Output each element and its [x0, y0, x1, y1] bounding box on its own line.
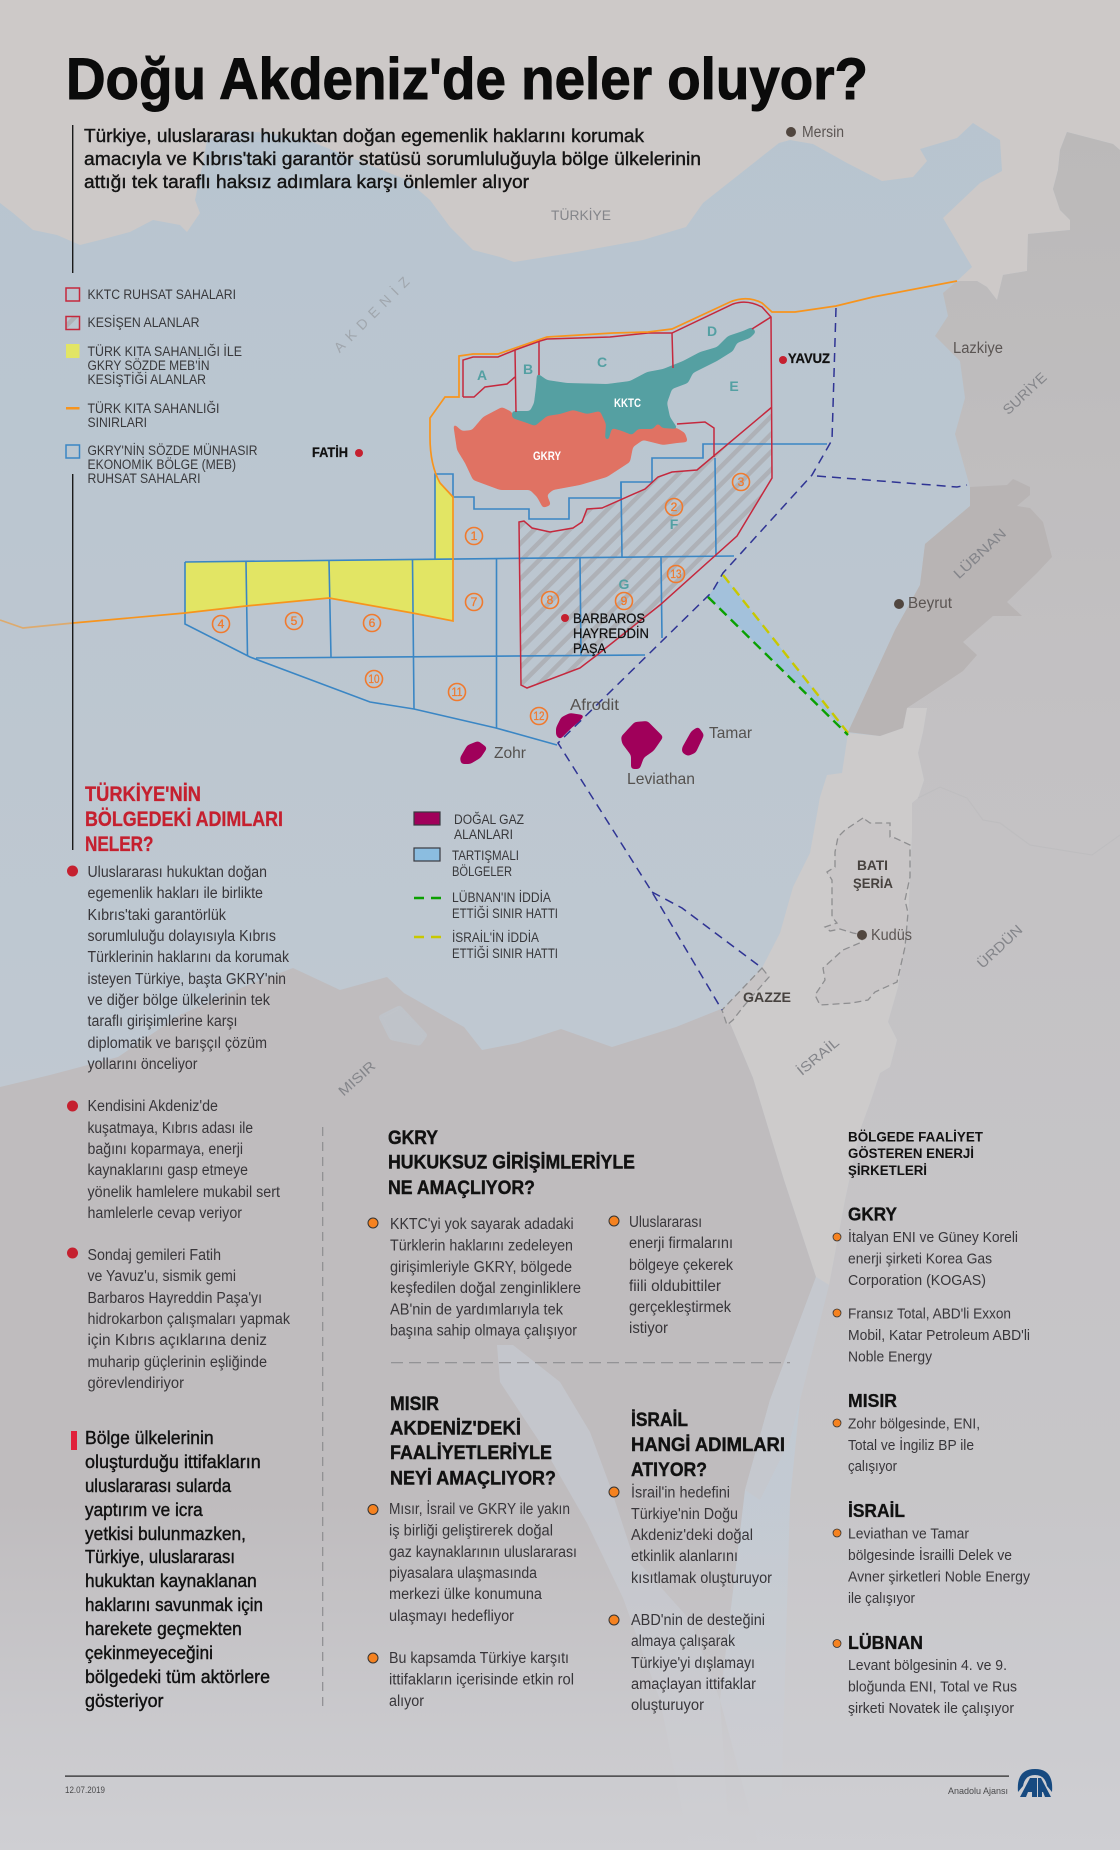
map: KKTC licence blocks (red): [463, 302, 772, 688]
country and sea labels: AKDENİZ: [330, 272, 413, 355]
map: Cyprus GKRY: [453, 407, 688, 508]
callout: alliances paragraph: çekinmeyeceğini: [85, 1643, 213, 1663]
text block: GKRY first point: keşfedilen doğal zenginliklere: [390, 1280, 581, 1297]
text block: third point: ve Yavuz'u, sismik gemi: [88, 1268, 236, 1285]
city labels: Mersin: [802, 124, 844, 141]
callout: alliances paragraph: harekete geçmekten: [85, 1619, 242, 1639]
subtitle: attığı tek taraflı haksız adımlara karşı önlemler alıyor: [84, 171, 529, 192]
companies: Israel: [833, 1500, 1030, 1607]
text block: first point: sorumluluğu dolayısıyla Kıbrıs: [88, 928, 276, 945]
map: block letters: C: [597, 354, 607, 370]
text block: third point: Sondaj gemileri Fatih: [88, 1247, 221, 1264]
gas field labels: [494, 697, 753, 788]
heading: Türkiye's steps: BÖLGEDEKİ ADIMLARI: [85, 808, 283, 831]
text block: Egypt second point: ittifakların içerisinde etkin rol: [389, 1672, 574, 1688]
map: block letters: F: [670, 516, 679, 532]
text block: GKRY second point: istiyor: [629, 1320, 668, 1337]
text block: second point: kuşatmaya, Kıbrıs adası ile: [88, 1120, 253, 1137]
map: numbered blocks: 12: [534, 709, 545, 723]
map: block letters: G: [619, 576, 630, 592]
text block: Israel second point: [609, 1612, 765, 1714]
city labels: [743, 124, 1003, 1005]
companies: Egypt: Zohr bölgesinde, ENI,: [848, 1416, 980, 1432]
panel: Israel steps: [609, 1408, 785, 1714]
companies: Lebanon: Levant bölgesinin 4. ve 9.: [848, 1657, 1007, 1674]
text block: GKRY first point: KKTC'yi yok sayarak adadaki: [390, 1216, 574, 1233]
text block: first point: taraflı girişimlerine karşı: [88, 1013, 238, 1030]
text block: second point: bağını koparmaya, enerji: [88, 1141, 243, 1158]
footer: 12.07.2019: [65, 1785, 105, 1796]
companies: Israel: İSRAİL: [848, 1500, 905, 1521]
text block: Egypt first point: ulaşmayı hedefliyor: [389, 1608, 514, 1625]
text block: Israel first point: kısıtlamak oluşturuyor: [631, 1570, 772, 1587]
heading: Israel: HANGİ ADIMLARI: [631, 1433, 785, 1456]
text block: third point: görevlendiriyor: [88, 1375, 184, 1392]
text block: third point: muharip güçlerinin eşliğinde: [88, 1354, 267, 1371]
legend: licence areas: GKRY'NİN SÖZDE MÜNHASIR: [88, 443, 258, 458]
map: disputed area: [708, 575, 848, 733]
legend: licence areas: KKTC RUHSAT SAHALARI: [88, 287, 236, 302]
companies: Israel: bölgesinde İsrailli Delek ve: [848, 1546, 1012, 1564]
map: numbered blocks: 8: [547, 593, 554, 607]
text block: GKRY second point: bölgeye çekerek: [629, 1257, 733, 1274]
text block: GKRY first point: AB'nin de yardımlarıyla tek: [390, 1302, 563, 1318]
text block: first point: Kıbrıs'taki garantörlük: [88, 907, 226, 924]
companies: GKRY: Mobil, Katar Petroleum ABD'li: [848, 1327, 1030, 1344]
text block: Egypt second point: [368, 1650, 574, 1710]
map: Lebanon claimed boundary: [708, 597, 848, 735]
text block: Egypt first point: [368, 1500, 577, 1625]
map: numbered blocks: 4: [218, 617, 225, 631]
footer: Anadolu Ajansı: [948, 1786, 1008, 1797]
map: numbered blocks: [212, 474, 750, 724]
heading: energy companies: ŞİRKETLERİ: [848, 1163, 927, 1178]
text block: second point: yönelik hamlelere mukabil sert: [88, 1184, 281, 1201]
text block: third point: [67, 1247, 290, 1392]
text block: second point: kaynaklarını gasp etmeye: [88, 1162, 248, 1179]
companies: Lebanon: şirketi Novatek ile çalışıyor: [848, 1700, 1014, 1717]
companies: GKRY: GKRY: [848, 1204, 898, 1224]
heading: energy companies: [848, 1130, 984, 1178]
country and sea labels: [330, 206, 1050, 1099]
footer: [65, 1776, 1009, 1797]
callout: alliances paragraph: oluşturduğu ittifakların: [85, 1452, 261, 1472]
country and sea labels: İSRAİL: [793, 1033, 842, 1078]
legend: licence areas: KESİŞEN ALANLAR: [88, 315, 200, 330]
text block: first point: isteyen Türkiye, başta GKRY'nin: [88, 971, 286, 988]
map: yellow overlap areas: [185, 475, 453, 621]
callout: alliances paragraph: yetkisi bulunmazken,: [85, 1524, 246, 1544]
heading: Israel: ATIYOR?: [631, 1459, 707, 1481]
heading: Egypt: FAALİYETLERİYLE: [390, 1441, 552, 1464]
heading: energy companies: BÖLGEDE FAALİYET: [848, 1130, 984, 1144]
companies: Israel: ile çalışıyor: [848, 1590, 915, 1607]
map: drilling ship markers: PAŞA: [573, 640, 607, 656]
heading: Egypt: MISIR: [390, 1393, 439, 1415]
legend: gas fields and claimed boundaries: DOĞAL GAZ: [454, 812, 524, 827]
legend: gas fields and claimed boundaries: [414, 812, 558, 961]
map: maritime boundary dashed lines: [558, 308, 967, 1010]
subtitle: [72, 125, 701, 273]
companies: Lebanon: LÜBNAN: [848, 1632, 923, 1653]
map: block letters: E: [729, 378, 739, 394]
map: Turkish continental shelf boundary: [0, 281, 957, 628]
city labels: Beyrut: [908, 595, 953, 612]
map: numbered blocks: 11: [452, 685, 463, 699]
text block: GKRY second point: Uluslararası: [629, 1214, 702, 1231]
text block: third point: için Kıbrıs açıklarına deniz: [88, 1332, 267, 1349]
text block: GKRY second point: enerji firmalarını: [629, 1235, 733, 1252]
legend: licence areas: [66, 287, 258, 486]
map: numbered blocks: 9: [621, 594, 628, 608]
subtitle: amacıyla ve Kıbrıs'taki garantör statüsü sorumluluğuyla bölge ülkelerinin: [84, 148, 701, 169]
text block: first point: Türklerinin haklarını da korumak: [88, 949, 289, 966]
city labels: GAZZE: [743, 989, 791, 1005]
map: numbered blocks: 13: [670, 567, 682, 581]
text block: first point: yollarını önceliyor: [88, 1056, 198, 1073]
text block: Egypt second point: alıyor: [389, 1693, 424, 1710]
legend: gas fields and claimed boundaries: İSRAİL'İN İDDİA: [452, 930, 539, 945]
text block: Israel second point: Türkiye'yi dışlamayı: [631, 1655, 755, 1672]
text block: Israel second point: ABD'nin de desteğini: [631, 1612, 765, 1629]
subtitle: Türkiye, uluslararası hukuktan doğan egemenlik haklarını korumak: [84, 125, 645, 146]
text block: second point: [67, 1098, 281, 1222]
legend: licence areas: EKONOMİK BÖLGE (MEB): [88, 457, 236, 472]
map: Cyprus GKRY: GKRY: [533, 449, 561, 463]
callout: alliances paragraph: Bölge ülkelerinin: [85, 1428, 214, 1448]
legend: gas fields and claimed boundaries: TARTIŞMALI: [452, 848, 519, 863]
heading: Türkiye's steps: TÜRKİYE'NİN: [85, 783, 201, 806]
text block: first point: ve diğer bölge ülkelerinin tek: [88, 992, 270, 1009]
country and sea labels: SURİYE: [999, 368, 1050, 418]
text block: Egypt first point: piyasalara ulaşmasında: [389, 1565, 537, 1582]
map: hatched overlap areas: [519, 407, 772, 688]
text block: first point: egemenlik hakları ile birlikte: [88, 885, 263, 902]
text block: second point: Kendisini Akdeniz'de: [88, 1098, 218, 1115]
text block: Israel first point: Akdeniz'deki doğal: [631, 1527, 753, 1544]
companies: Lebanon: bloğunda ENI, Total ve Rus: [848, 1678, 1017, 1696]
map: GKRY licence blocks (blue): [185, 444, 827, 745]
map: drilling ship markers: BARBAROS: [573, 610, 645, 626]
companies: Egypt: Total ve İngiliz BP ile: [848, 1436, 974, 1454]
text block: GKRY first point: başına sahip olmaya çalışıyor: [390, 1322, 577, 1340]
panel: Türkiye's steps: [67, 474, 290, 1392]
gas field labels: Leviathan: [627, 771, 695, 788]
map: numbered blocks: 7: [471, 595, 478, 609]
map: block letters: [477, 323, 739, 592]
callout: alliances paragraph: bölgedeki tüm aktörlere: [85, 1667, 270, 1687]
icon: Anadolu Agency logo: [1018, 1769, 1052, 1797]
text block: GKRY second point: [609, 1214, 733, 1337]
companies: Israel: Avner şirketleri Noble Energy: [848, 1568, 1030, 1586]
legend: licence areas: GKRY SÖZDE MEB'İN: [88, 358, 210, 373]
companies: GKRY: Fransız Total, ABD'li Exxon: [848, 1306, 1011, 1322]
country and sea labels: LÜBNAN: [949, 524, 1009, 582]
text block: Israel first point: İsrail'in hedefini: [631, 1484, 730, 1502]
legend: licence areas: TÜRK KITA SAHANLIĞI: [88, 401, 220, 416]
text block: Egypt first point: merkezi ülke konumuna: [389, 1586, 542, 1603]
text block: third point: hidrokarbon çalışmaları yapmak: [88, 1311, 290, 1328]
callout: alliances paragraph: haklarını savunmak için: [85, 1595, 263, 1615]
map: numbered blocks: 3: [738, 475, 745, 489]
legend: gas fields and claimed boundaries: ALANLARI: [454, 827, 513, 842]
text block: Israel second point: amaçlayan ittifaklar: [631, 1676, 756, 1693]
map: gas fields: [461, 714, 703, 768]
text block: Israel second point: oluşturuyor: [631, 1697, 704, 1714]
text block: Egypt first point: iş birliği geliştirerek doğal: [389, 1522, 553, 1540]
gas field labels: Zohr: [494, 745, 527, 762]
map: Cyprus KKTC: [512, 327, 756, 441]
country and sea labels: MISIR: [335, 1058, 378, 1099]
map: Israel claimed boundary: [723, 575, 848, 733]
map: drilling ship markers: [312, 350, 830, 656]
text block: GKRY first point: Türklerin haklarını zedeleyen: [390, 1238, 573, 1254]
text block: GKRY first point: [368, 1216, 581, 1340]
text block: second point: hamlelerle cevap veriyor: [88, 1205, 242, 1222]
legend: gas fields and claimed boundaries: LÜBNAN'IN İDDİA: [452, 890, 551, 905]
text block: first point: diplomatik ve barışçıl çözüm: [88, 1035, 267, 1052]
companies: GKRY: Noble Energy: [848, 1348, 932, 1366]
callout: alliances paragraph: Türkiye, uluslararası: [85, 1547, 235, 1567]
heading: Israel: İSRAİL: [631, 1408, 688, 1431]
title: Doğu Akdeniz'de neler oluyor?: [66, 47, 868, 112]
map: West Bank: [815, 818, 910, 1005]
text block: Egypt second point: Bu kapsamda Türkiye karşıtı: [389, 1650, 569, 1667]
country and sea labels: TÜRKİYE: [551, 206, 611, 223]
heading: GKRY: NE AMAÇLIYOR?: [388, 1177, 535, 1199]
text block: Israel first point: etkinlik alanlarını: [631, 1548, 738, 1565]
legend: licence areas: TÜRK KITA SAHANLIĞI İLE: [88, 344, 242, 359]
map: block letters: B: [523, 361, 533, 377]
callout: alliances paragraph: uluslararası sularda: [85, 1476, 232, 1496]
legend: licence areas: RUHSAT SAHALARI: [88, 471, 200, 486]
map: numbered blocks: 2: [671, 500, 678, 514]
city labels: BATI: [857, 857, 888, 873]
legend: licence areas: KESİŞTİĞİ ALANLAR: [88, 372, 206, 387]
heading: Egypt: AKDENİZ'DEKİ: [390, 1416, 521, 1440]
text block: Egypt first point: gaz kaynaklarının uluslararası: [389, 1544, 577, 1561]
country and sea labels: ÜRDÜN: [973, 921, 1026, 971]
callout: alliances paragraph: [71, 1428, 270, 1711]
panel: Egypt aims: [368, 1393, 577, 1710]
heading: energy companies: GÖSTEREN ENERJİ: [848, 1146, 974, 1161]
text block: GKRY second point: gerçekleştirmek: [629, 1299, 731, 1316]
text block: GKRY first point: girişimleriyle GKRY, bölgede: [390, 1259, 572, 1276]
companies: Egypt: çalışıyor: [848, 1458, 897, 1475]
city labels: Lazkiye: [953, 340, 1003, 357]
map: drilling ship markers: YAVUZ: [788, 350, 830, 366]
callout: alliances paragraph: yaptırım ve icra: [85, 1500, 204, 1520]
companies: GKRY: [833, 1204, 1030, 1366]
legend: gas fields and claimed boundaries: ETTİĞİ SINIR HATTI: [452, 946, 558, 961]
legend: licence areas: SINIRLARI: [88, 415, 147, 430]
text block: first point: [67, 864, 289, 1073]
companies: Egypt: MISIR: [848, 1390, 897, 1411]
text block: Israel second point: almaya çalışarak: [631, 1633, 735, 1650]
panel: GKRY aims: [368, 1127, 733, 1340]
companies: Egypt: [833, 1390, 980, 1475]
map: drilling ship markers: FATİH: [312, 444, 348, 460]
text block: third point: Barbaros Hayreddin Paşa'yı: [88, 1290, 262, 1307]
text block: Israel first point: [609, 1484, 772, 1587]
legend: gas fields and claimed boundaries: ETTİĞİ SINIR HATTI: [452, 906, 558, 921]
heading: GKRY: [388, 1127, 635, 1199]
legend: gas fields and claimed boundaries: BÖLGELER: [452, 864, 512, 879]
heading: Türkiye's steps: NELER?: [85, 833, 154, 856]
heading: Israel: [631, 1408, 785, 1481]
map: numbered blocks: 1: [471, 529, 478, 543]
panel: energy companies: [833, 1130, 1030, 1717]
heading: Egypt: [390, 1393, 556, 1490]
heading: GKRY: GKRY: [388, 1127, 438, 1149]
map: numbered blocks: 10: [368, 672, 380, 686]
city labels: Kudüs: [871, 927, 912, 944]
heading: Egypt: NEYİ AMAÇLIYOR?: [390, 1466, 556, 1490]
text block: GKRY second point: fiili oldubittiler: [629, 1278, 721, 1295]
companies: GKRY: enerji şirketi Korea Gas: [848, 1250, 992, 1268]
map: Gaza: [722, 968, 769, 1025]
companies: Lebanon: [833, 1632, 1017, 1717]
callout: alliances paragraph: hukuktan kaynaklanan: [85, 1571, 257, 1591]
gas field labels: Tamar: [709, 725, 753, 742]
heading: Türkiye's steps: [85, 783, 283, 856]
map: block letters: A: [477, 367, 487, 383]
text block: first point: Uluslararası hukuktan doğan: [88, 864, 267, 881]
city labels: ŞERİA: [853, 875, 893, 891]
companies: Israel: Leviathan ve Tamar: [848, 1526, 969, 1542]
text block: Israel first point: Türkiye'nin Doğu: [631, 1506, 738, 1523]
callout: alliances paragraph: gösteriyor: [85, 1691, 164, 1711]
companies: GKRY: İtalyan ENI ve Güney Koreli: [848, 1228, 1018, 1246]
map: numbered blocks: 5: [291, 614, 298, 628]
gas field labels: Afrodit: [570, 697, 620, 714]
text block: Egypt first point: Mısır, İsrail ve GKRY ile yakın: [389, 1500, 570, 1518]
map: numbered blocks: 6: [369, 616, 376, 630]
map: drilling ship markers: HAYREDDİN: [573, 624, 649, 641]
map: block letters: D: [707, 323, 717, 339]
companies: GKRY: Corporation (KOGAS): [848, 1272, 986, 1289]
heading: GKRY: HUKUKSUZ GİRİŞİMLERİYLE: [388, 1150, 635, 1174]
map: Cyprus KKTC: KKTC: [614, 396, 641, 410]
